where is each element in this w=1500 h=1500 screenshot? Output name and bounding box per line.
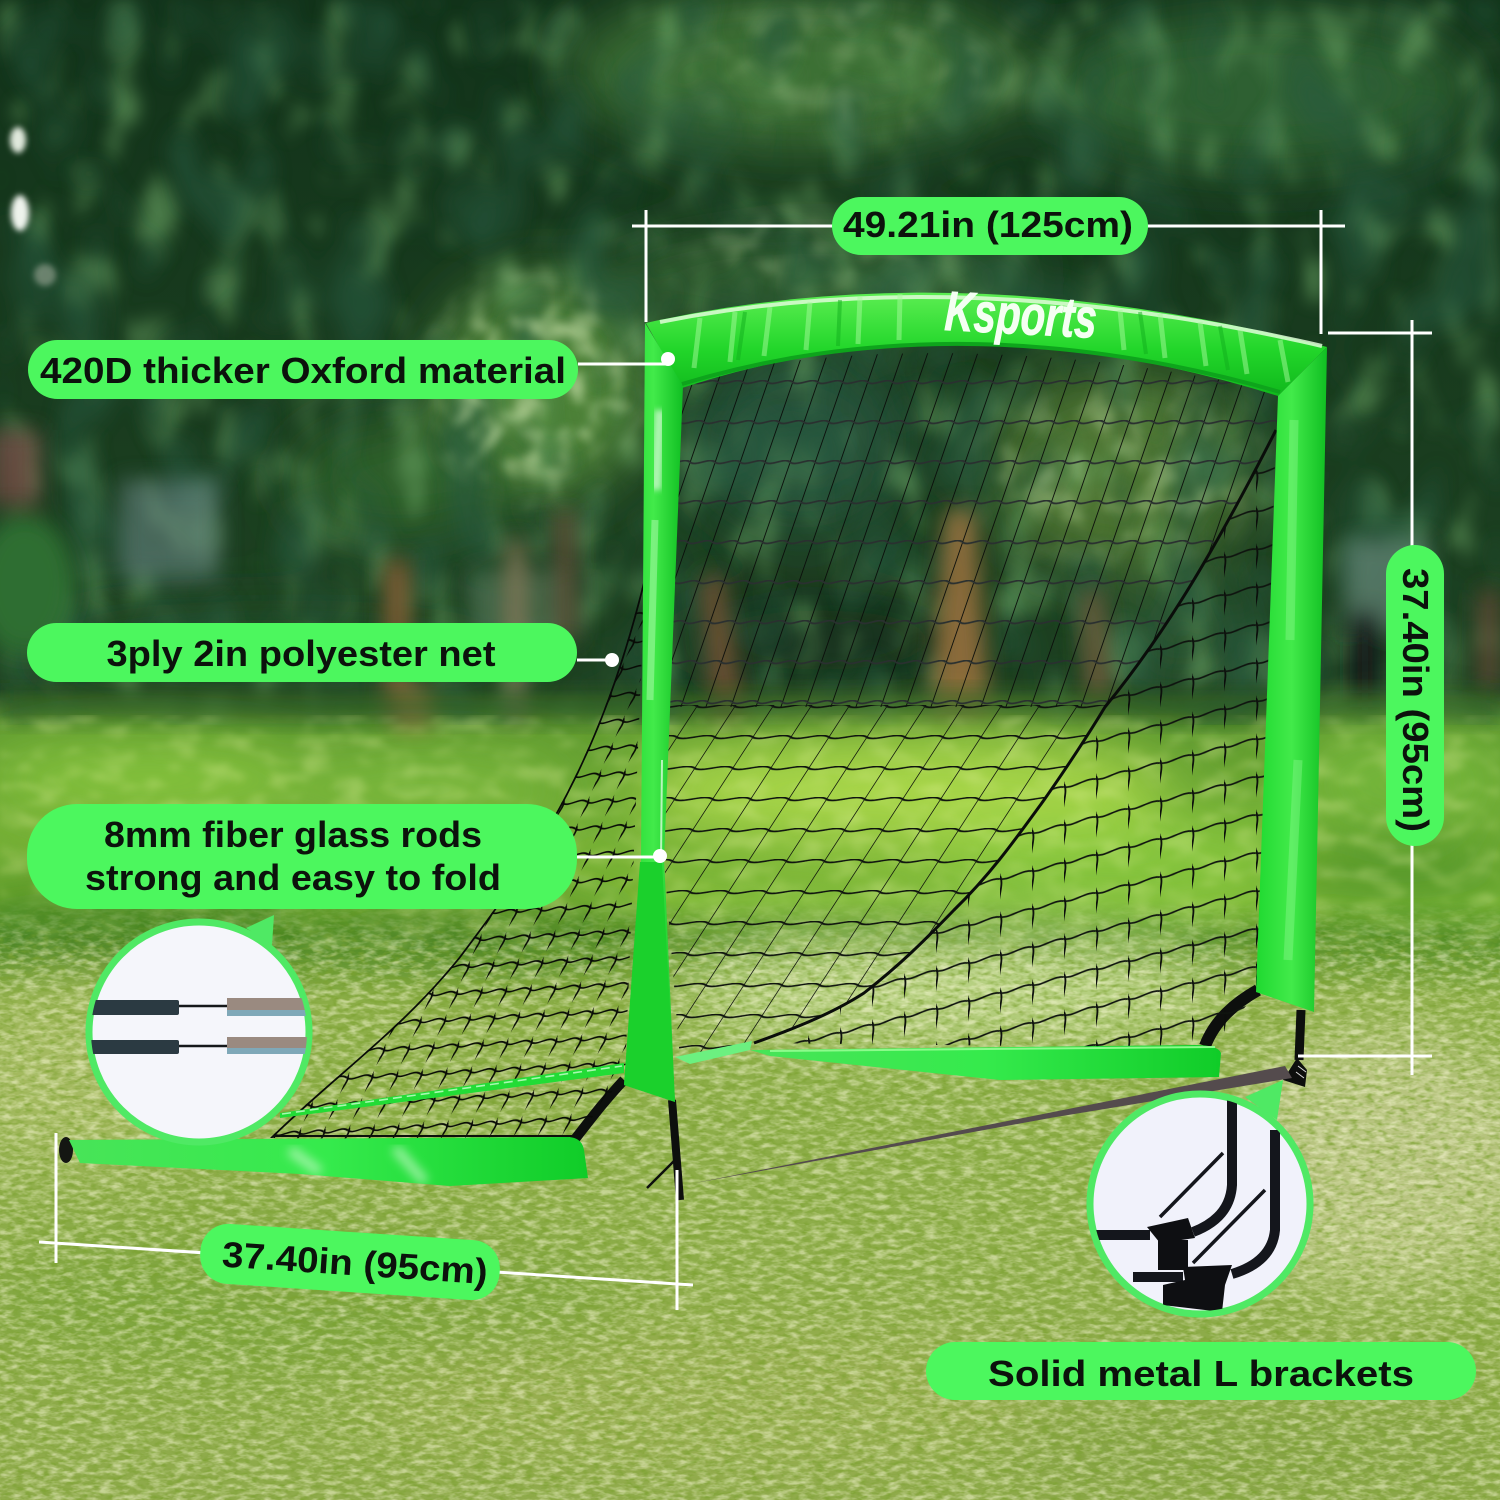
goal: black L brackets and ground anchors xyxy=(59,990,1307,1200)
goal: ground bars xyxy=(69,1041,1221,1186)
callout: Solid metal L brackets: Solid metal L brackets xyxy=(988,1353,1414,1394)
callout: 8mm fiber glass rods: strong and easy to fold xyxy=(85,857,501,898)
dimension pill: width 49.21in: 49.21in (125cm) xyxy=(843,204,1133,245)
dimension pill: height 37.40in xyxy=(1386,545,1444,846)
callout: 420D thicker Oxford material xyxy=(28,340,675,399)
goal: rear net panel xyxy=(776,467,1275,1046)
goal: net seam xyxy=(754,430,1276,1043)
goal: front net, lower panel xyxy=(665,705,1104,1052)
dimension lines xyxy=(39,210,1432,1310)
goal: green fabric frame xyxy=(624,293,1327,1102)
goal: grey ground strap xyxy=(690,1066,1292,1184)
goal: side net xyxy=(270,582,644,1138)
dimension pill: depth 37.40in: 37.40in (95cm) xyxy=(221,1234,489,1292)
inset: metal L brackets xyxy=(1090,1080,1310,1314)
inset: fiber glass rod joint xyxy=(89,915,309,1142)
callout: Solid metal L brackets xyxy=(926,1342,1476,1400)
callout: 3ply 2in polyester net: 3ply 2in polyester net xyxy=(106,633,496,674)
callout: 3ply 2in polyester net xyxy=(27,623,619,682)
callout: 8mm fiber glass rods: 8mm fiber glass rods xyxy=(104,814,482,855)
brand logo: Ksports xyxy=(943,279,1098,350)
dimension pill: height 37.40in: 37.40in (95cm) xyxy=(1395,568,1436,832)
callout: 420D thicker Oxford material: 420D thicker Oxford material xyxy=(40,350,566,391)
dimension pill: width 49.21in xyxy=(832,197,1148,255)
callout: 8mm fiber glass rods xyxy=(27,804,667,909)
goal: front net, upper panel xyxy=(670,353,1277,707)
dimension pill: depth 37.40in xyxy=(198,1222,502,1302)
